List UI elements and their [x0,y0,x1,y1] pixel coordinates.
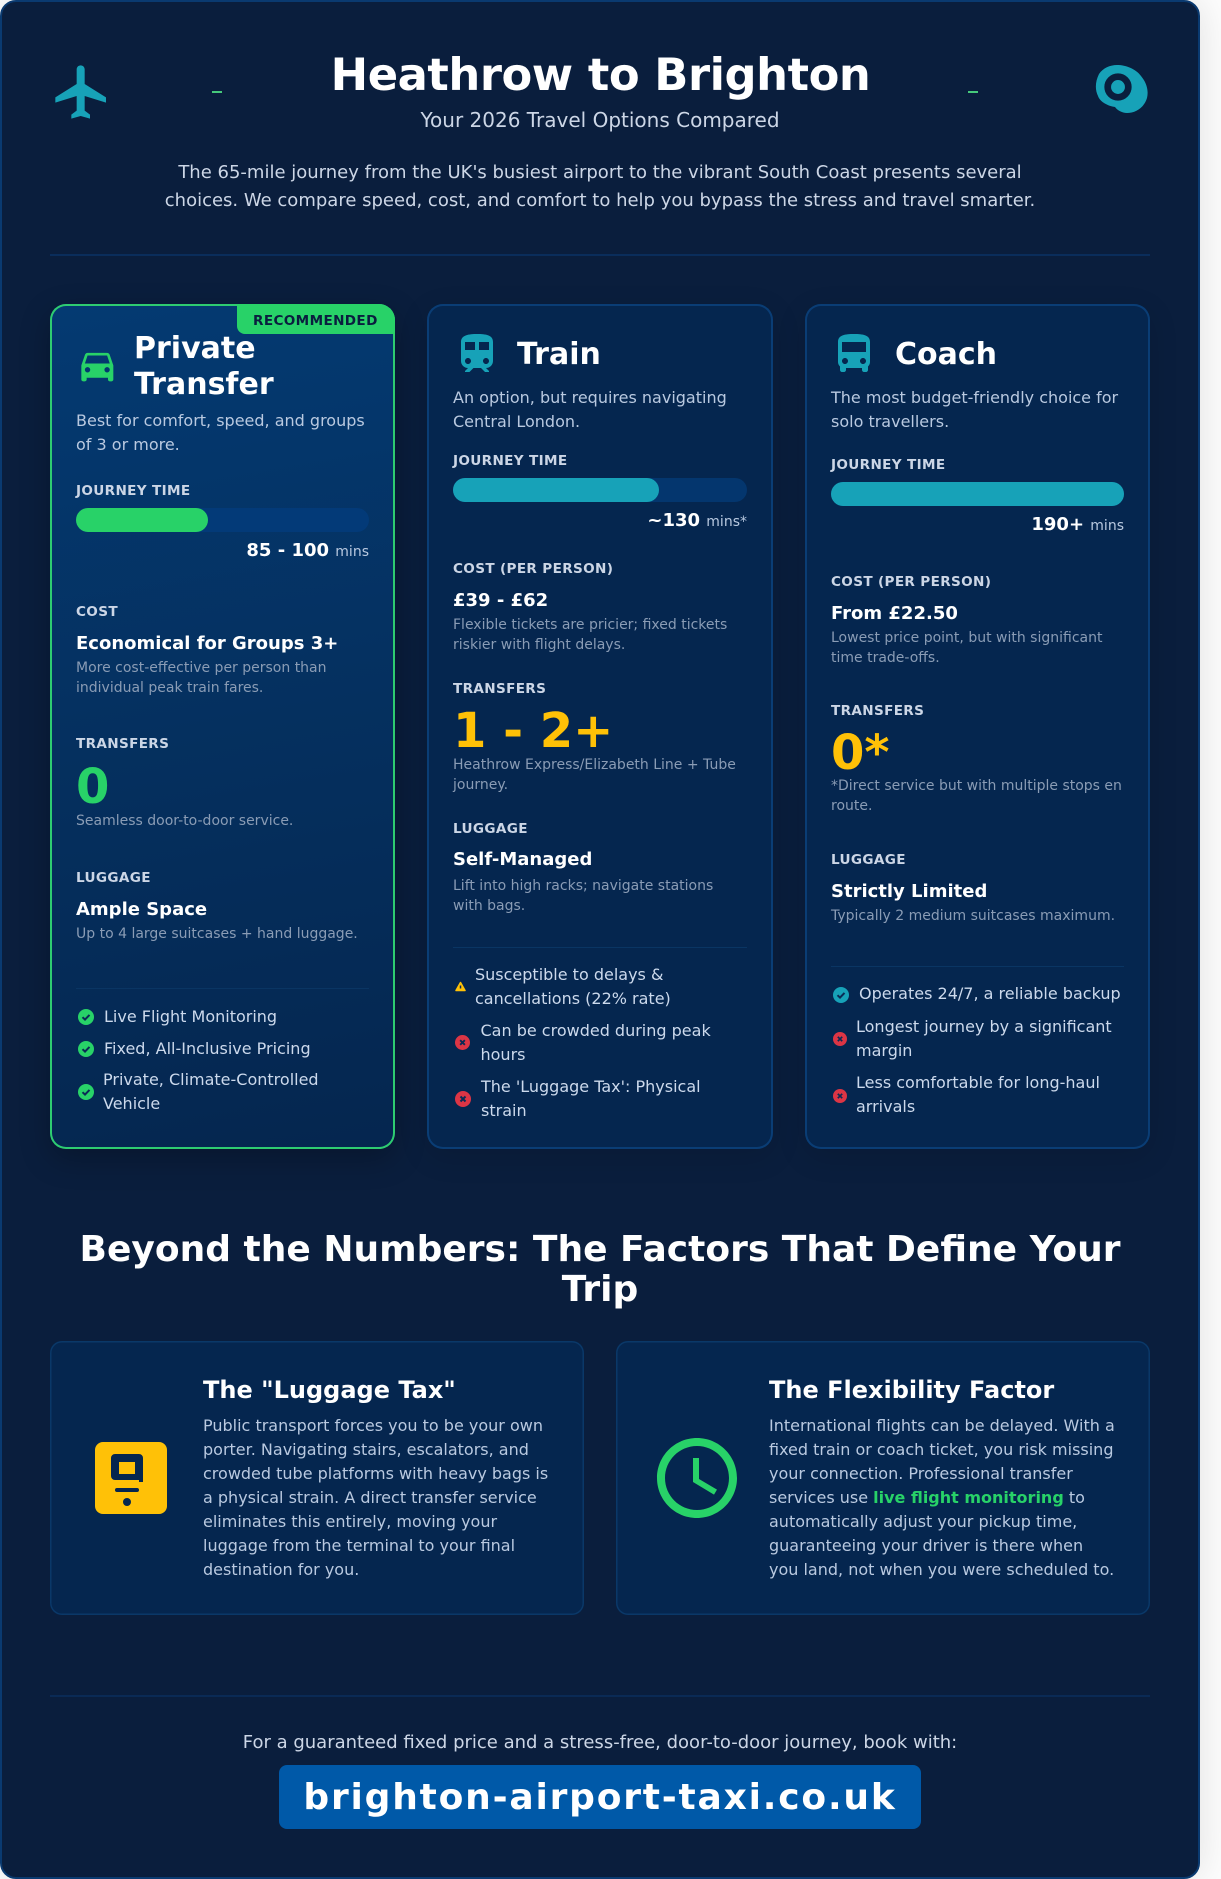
description [453,388,727,431]
journey time bar [76,508,369,532]
heading: private transfer: Transfer [134,367,274,402]
metric: cost: riskier with flight delays. [453,637,625,653]
section heading: Beyond the Numbers: The Factors That Define Your [80,1229,1120,1270]
drawback: longest journey: margin [856,1041,912,1060]
metric: cost [453,561,727,653]
drawback: luggage tax [455,1077,701,1120]
metric: transfers: TRANSFERS [453,681,546,697]
subtitle: Your 2026 Travel Options Compared [420,108,780,132]
body: flexibility factor: services use live flight monitoring to [769,1488,1085,1507]
body: flexibility factor: your connection. Professional transfer [769,1464,1073,1483]
recommended badge: RECOMMENDED [253,313,378,329]
icon: car [81,352,114,382]
metric: cost: COST [76,604,118,620]
section heading: Trip [562,1269,638,1310]
metric: luggage [830,852,1115,924]
journey time value: 85 - 100 mins [246,540,369,561]
heading: flexibility factor: The Flexibility Factor [769,1376,1054,1404]
body: luggage tax: luggage from the terminal to your final [203,1536,515,1555]
metric: cost: £39 - £62 [453,590,548,610]
metric: luggage: LUGGAGE [76,870,151,886]
heading: private transfer [134,331,274,402]
panel: luggage tax [50,1341,584,1615]
recommended badge [237,304,395,334]
metric: cost: From £22.50 [831,603,958,624]
metric: transfers: Seamless door-to-door service. [76,813,293,829]
icon: location blob [1096,65,1148,113]
metric: journey time: JOURNEY TIME [831,457,945,473]
description: solo travellers. [831,412,949,431]
metric: luggage: Up to 4 large suitcases + hand luggage. [76,926,358,942]
drawback: longest journey [833,1017,1112,1060]
metric: cost: individual peak train fares. [76,680,263,696]
panel: coach card [805,304,1150,1149]
panel: flexibility factor [616,1341,1150,1615]
intro text: The 65-mile journey from the UK's busiest airport to the vibrant South Coast presents several [178,162,1022,183]
metric: luggage: LUGGAGE [453,821,528,837]
metric: journey time: JOURNEY TIME [76,483,190,499]
body: luggage tax [203,1416,548,1579]
feature: private vehicle [78,1070,319,1113]
feature: private vehicle: Private, Climate-Controlled [103,1070,319,1089]
body: luggage tax: eliminates this entirely, moving your [203,1512,497,1531]
metric: transfers: route. [831,798,872,814]
accent dash right [968,91,978,93]
description: An option, but requires navigating [453,388,727,407]
body: flexibility factor [769,1414,1115,1582]
body: flexibility factor: International flights can be delayed. With a [769,1416,1115,1435]
metric: cost: Economical for Groups 3+ [76,632,338,654]
icon: train [461,334,493,372]
body: flexibility factor: fixed train or coach ticket, you risk missing [769,1440,1113,1459]
metric: transfers: journey. [453,777,508,793]
drawback: comfort [833,1072,1100,1116]
drawback: crowded: Can be crowded during peak [480,1021,711,1040]
body: flexibility factor: automatically adjust your pickup time, [769,1512,1077,1531]
call to action text: For a guaranteed fixed price and a stress-free, door-to-door journey, book with: [243,1732,957,1753]
intro text: choices. We compare speed, cost, and comfort to help you bypass the stress and travel smarter. [165,190,1035,211]
metric: transfers: Heathrow Express/Elizabeth Line + Tube [453,757,736,773]
metric: journey time: JOURNEY TIME [453,453,567,469]
feature: fixed pricing: Fixed, All-Inclusive Pricing [104,1039,311,1058]
heading: luggage tax: The "Luggage Tax" [203,1376,456,1404]
metric: luggage: Lift into high racks; navigate stations [453,878,713,894]
description: Best for comfort, speed, and groups [76,411,365,430]
icon: clock [649,1430,745,1526]
metric: transfers [831,703,1122,814]
feature: private vehicle: Vehicle [103,1094,160,1113]
icon: luggage [95,1442,167,1514]
metric: transfers [452,681,736,793]
metric: luggage: Strictly Limited [831,881,987,902]
description: Central London. [453,412,580,431]
section heading [80,1229,1120,1310]
metric: luggage: Typically 2 medium suitcases maximum. [831,908,1115,924]
icon: coach [838,334,870,372]
metric: cost: COST (PER PERSON) [831,574,991,590]
feature: live flight monitoring: Live Flight Monitoring [104,1007,277,1026]
metric: cost [76,604,338,696]
journey time value: ~130 mins* [647,510,747,531]
metric: journey time [830,457,1124,535]
body: flexibility factor: you land, not when you were scheduled to. [769,1560,1114,1579]
metric: transfers: 0 [76,759,109,815]
metric: cost: COST (PER PERSON) [453,561,613,577]
intro text [165,162,1035,211]
description [830,388,1118,431]
description: The most budget-friendly choice for [831,388,1118,407]
journey time bar [831,482,1124,506]
body: luggage tax: a physical strain. A direct transfer service [203,1488,537,1507]
metric: luggage: Ample Space [76,899,207,920]
feature list [455,965,711,1120]
heading: train: Train [517,337,601,372]
drawback: comfort: Less comfortable for long-haul [856,1072,1100,1092]
metric: transfers [76,736,293,829]
body: luggage tax: porter. Navigating stairs, escalators, and [203,1440,529,1459]
metric: luggage: Self-Managed [453,849,592,870]
metric: luggage [76,870,358,942]
body: luggage tax: crowded tube platforms with heavy bags is [203,1464,548,1483]
panel: private transfer card [50,304,395,1149]
body: luggage tax: destination for you. [203,1560,359,1579]
metric: transfers: TRANSFERS [76,736,169,752]
metric: luggage [453,821,713,914]
benefit: operates 24/7: Operates 24/7, a reliable backup [859,984,1121,1003]
accent dash left [212,91,222,93]
body: flexibility factor: guaranteeing your driver is there when [769,1536,1083,1555]
body: luggage tax: Public transport forces you to be your own [203,1416,543,1435]
panel: train card [427,304,773,1149]
metric: transfers: 1 - 2+ [453,703,613,759]
warning: delays: Susceptible to delays & [475,965,663,984]
feature list [833,984,1121,1116]
drawback: longest journey: Longest journey by a significant [856,1017,1112,1036]
description: of 3 or more. [76,435,180,454]
metric: cost: time trade-offs. [831,650,940,666]
warning: delays: cancellations (22% rate) [475,989,671,1008]
drawback: luggage tax: strain [481,1101,527,1120]
metric: cost: Flexible tickets are pricier; fixed tickets [453,617,727,633]
drawback: comfort: arrivals [856,1096,915,1116]
metric: journey time [75,483,369,561]
description [76,411,365,454]
metric: cost: Lowest price point, but with significant [831,630,1102,646]
metric: cost [831,574,1102,666]
metric: journey time [452,453,747,531]
metric: transfers: TRANSFERS [831,703,924,719]
website button [279,1765,921,1829]
drawback: crowded [455,1021,711,1064]
icon: plane [55,65,106,119]
website button: brighton-airport-taxi.co.uk [303,1777,897,1818]
metric: transfers: *Direct service but with multiple stops en [831,778,1122,794]
metric: luggage: with bags. [453,898,525,914]
journey time value: 190+ mins [1031,514,1124,535]
metric: luggage: LUGGAGE [831,852,906,868]
heading: coach: Coach [895,337,997,372]
metric: transfers: 0* [831,725,890,781]
feature list [78,1007,319,1113]
journey time bar [453,478,747,502]
heading: private transfer: Private [134,331,256,366]
drawback: luggage tax: The 'Luggage Tax': Physical [481,1077,701,1096]
metric: cost: More cost-effective per person than [76,660,327,676]
drawback: crowded: hours [480,1045,525,1064]
warning: delays [455,965,671,1008]
title: Heathrow to Brighton [331,48,870,101]
